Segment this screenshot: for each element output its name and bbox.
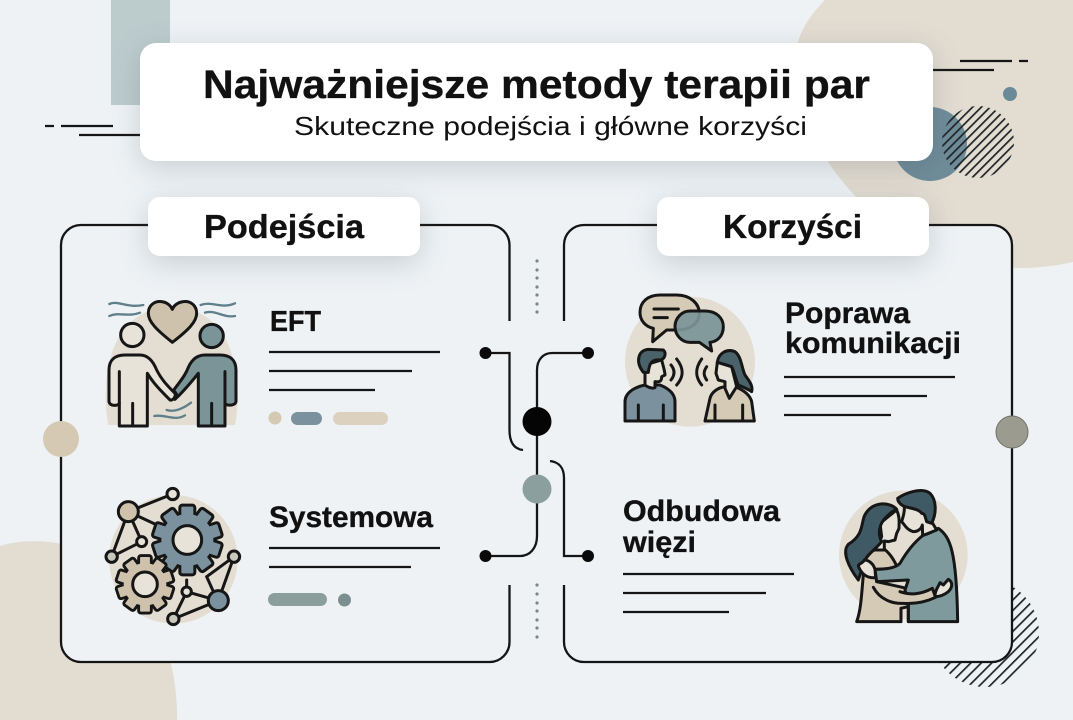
decorative beige blob top right [794, 0, 1073, 268]
icon: embracing couple [839, 491, 968, 622]
heading: Podejścia: Podejścia [204, 208, 365, 245]
text: Poprawa komunikacji: Poprawa [785, 297, 910, 330]
text: Odbudowa więzi: więzi [622, 526, 696, 559]
text: Odbudowa więzi: Odbudowa [623, 495, 780, 528]
decorative beige circle bottom left [0, 541, 177, 720]
heading: Podejścia [148, 197, 420, 256]
decorative dashes top right [933, 61, 1028, 70]
text: Odbudowa więzi [622, 495, 794, 612]
decorative dashes top left [45, 126, 140, 135]
panel: approaches [61, 225, 510, 662]
title: Najważniejsze metody terapii par [203, 63, 870, 107]
panel: benefits [564, 225, 1012, 662]
right edge node [996, 416, 1028, 448]
central connectors [480, 259, 594, 639]
icon: gears and network [106, 488, 240, 625]
heading: Korzyści [657, 197, 929, 256]
subtitle: Skuteczne podejścia i główne korzyści [294, 111, 807, 141]
text: EFT [268, 306, 440, 425]
decorative teal circle [893, 107, 967, 181]
icon: two people talking [625, 295, 755, 427]
decorative dot top right [1003, 87, 1017, 101]
text: Poprawa komunikacji [784, 297, 961, 415]
icon: couple with heart [106, 302, 238, 426]
text: Poprawa komunikacji: komunikacji [785, 327, 961, 360]
decorative hatched circle top right [942, 106, 1014, 178]
heading: Korzyści: Korzyści [723, 208, 862, 245]
left edge node [43, 421, 79, 457]
decorative teal rectangle [111, 0, 170, 105]
text: Systemowa: Systemowa [269, 501, 433, 534]
text: Systemowa [268, 501, 440, 606]
title card [140, 43, 933, 161]
text: EFT: EFT [270, 306, 321, 338]
decorative hatched circle bottom right [931, 579, 1039, 687]
